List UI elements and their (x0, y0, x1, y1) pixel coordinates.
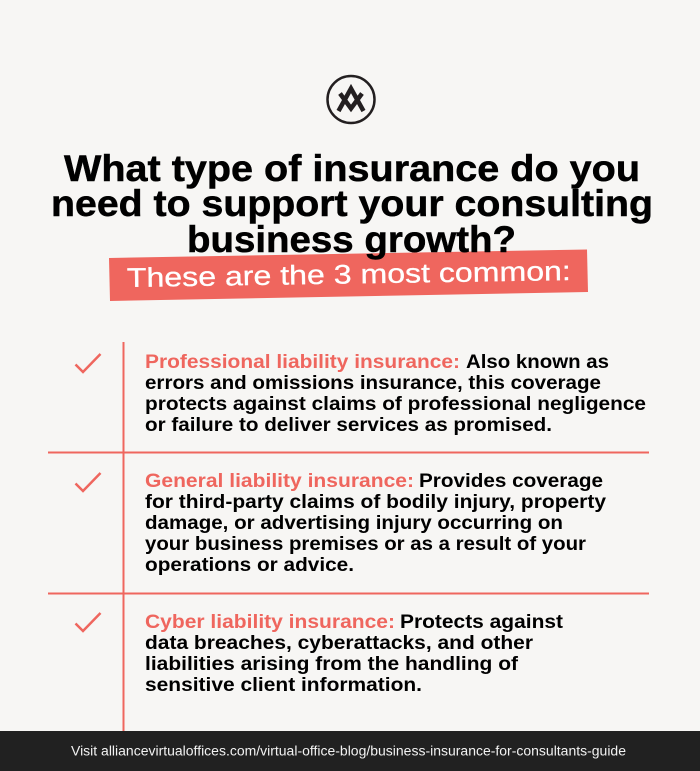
text: general liability: damage, or advertising injury occurring on (145, 513, 563, 534)
footer bar (0, 731, 700, 771)
callout: these are the 3 most common (109, 250, 588, 301)
text: cyber liability: sensitive client information. (145, 675, 422, 696)
title: What type of insurance do you (64, 148, 640, 189)
text: cyber liability: liabilities arising from the handling of (145, 654, 519, 675)
text: cyber liability: data breaches, cyberattacks, and other (145, 633, 534, 654)
horizontal divider 1 (48, 452, 649, 454)
text: cyber liability: Cyber liability insurance: (145, 612, 395, 633)
vertical divider (122, 342, 124, 731)
text: cyber liability (145, 612, 564, 696)
text: general liability: operations or advice. (145, 555, 354, 576)
callout: these are the 3 most common: These are the 3 most common: (127, 256, 571, 293)
title: need to support your consulting (51, 183, 653, 224)
icon: check 1 (76, 354, 100, 372)
horizontal divider 2 (48, 592, 649, 594)
text: professional liability: Professional liability insurance: (145, 352, 460, 373)
text: professional liability: protects against claims of professional negligence (145, 394, 646, 415)
footer bar: Visit alliancevirtualoffices.com/virtual-office-blog/business-insurance-for-consultants-guide (71, 744, 626, 758)
icon: logo (328, 76, 374, 123)
icon: check 3 (76, 613, 100, 631)
icon: check 2 (76, 473, 100, 491)
text: professional liability: Also known as (466, 352, 609, 373)
text: professional liability: or failure to deliver services as promised. (145, 415, 552, 436)
title: business growth? (187, 219, 516, 260)
text: general liability: General liability insurance: (145, 471, 414, 492)
text: general liability: for third-party claims of bodily injury, property (145, 492, 606, 513)
title (51, 148, 653, 260)
text: professional liability: errors and omissions insurance, this coverage (145, 373, 601, 394)
text: general liability: your business premises or as a result of your (145, 534, 587, 555)
text: cyber liability: Protects against (400, 612, 564, 633)
text: professional liability (145, 352, 646, 436)
text: general liability (145, 471, 606, 576)
text: general liability: Provides coverage (419, 471, 603, 492)
